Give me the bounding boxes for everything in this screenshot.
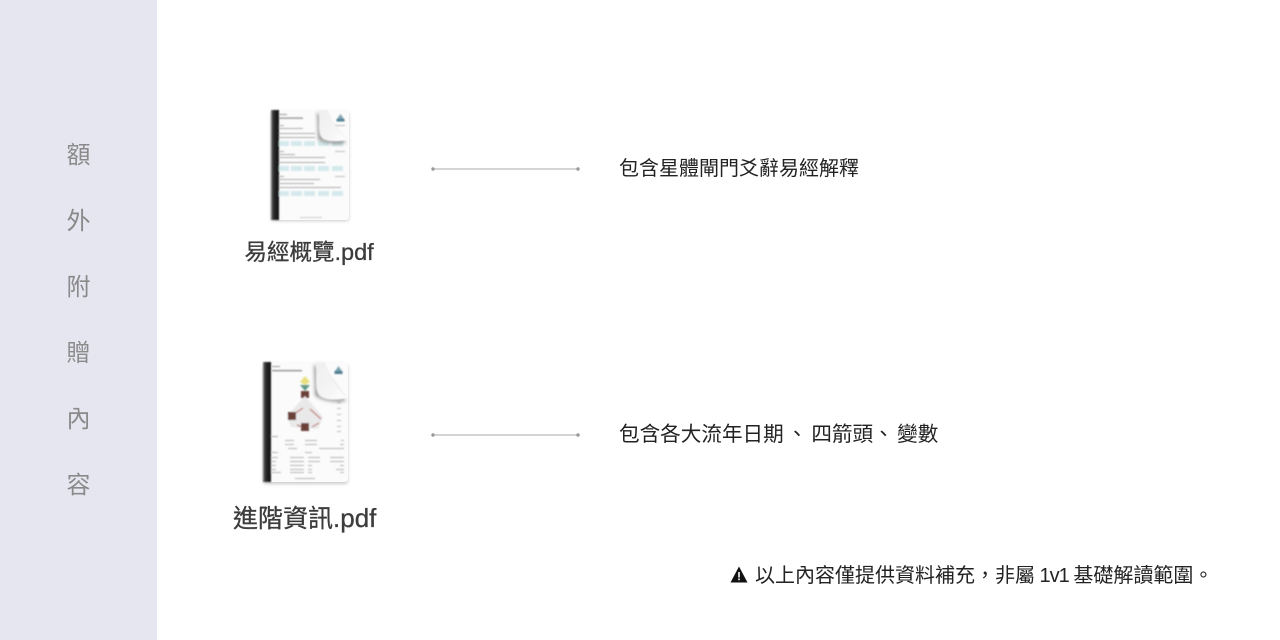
sidebar heading: 額外附贈內容 xyxy=(66,142,90,499)
description 1: 包含星體閘門爻辭易經解釋 xyxy=(619,158,859,180)
footnote text: 以上內容僅提供資料補充，非屬 1v1 基礎解讀範圍。 xyxy=(755,565,1213,587)
sidebar heading: 額外附贈內容: 附 xyxy=(66,274,90,301)
sidebar heading: 額外附贈內容: 贈 xyxy=(66,340,90,367)
icon: PDF document 進階資訊 xyxy=(262,360,350,486)
sidebar heading: 額外附贈內容: 容 xyxy=(66,472,90,499)
icon: PDF document 易經概覽 xyxy=(270,108,350,222)
sidebar heading: 額外附贈內容: 內 xyxy=(66,406,90,433)
connector line 2 xyxy=(431,433,580,437)
connector line 1 xyxy=(431,167,580,171)
sidebar heading: 額外附贈內容: 額 xyxy=(66,142,90,169)
sidebar heading: 額外附贈內容: 外 xyxy=(66,208,90,235)
footnote with warning icon xyxy=(730,564,1213,587)
file name: 易經概覽.pdf: 易經概覽.pdf xyxy=(244,239,374,265)
panel: sidebar xyxy=(0,0,157,640)
description 2: 包含各大流年日期、四箭頭、變數 xyxy=(619,423,938,446)
icon: warning triangle xyxy=(730,566,748,582)
file name: 進階資訊.pdf: 進階資訊.pdf xyxy=(233,503,376,533)
